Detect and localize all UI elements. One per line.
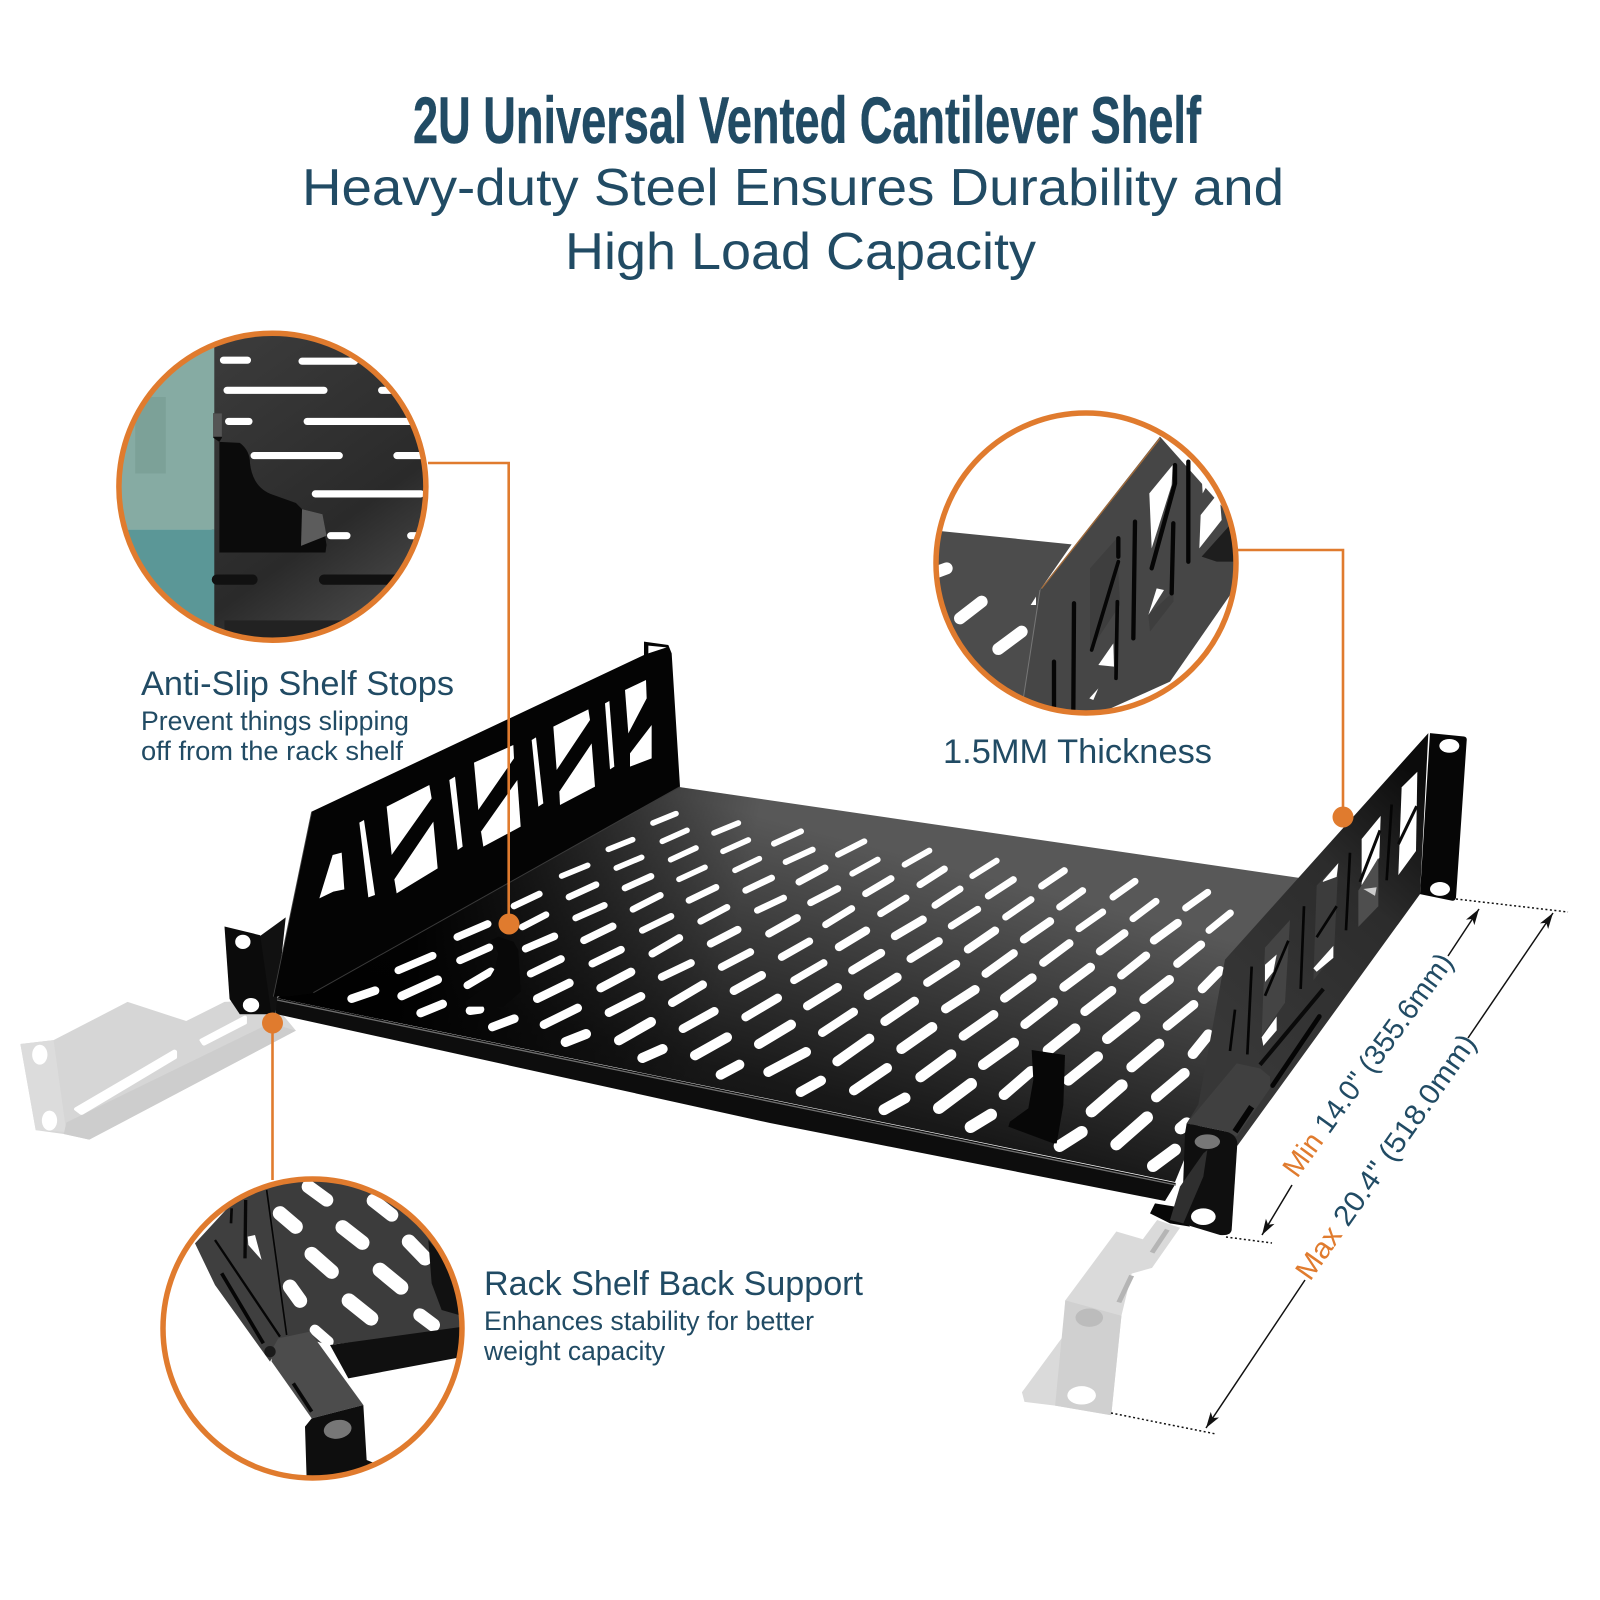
ghost bracket: extended left rail bbox=[20, 1000, 296, 1140]
subtitle line 2: High Load Capacity bbox=[565, 223, 1036, 281]
dot: thickness bbox=[1332, 806, 1354, 828]
panel: thickness detail bbox=[930, 413, 1242, 713]
left rear ear bbox=[224, 917, 286, 1014]
subtitle line 1: Heavy-duty Steel Ensures Durability and bbox=[302, 159, 1284, 217]
connector: back support bbox=[271, 1023, 274, 1180]
dimension label: min: Min 14.0" (355.6mm) bbox=[1277, 947, 1460, 1183]
right upright wall bbox=[1187, 733, 1467, 1146]
dot: back support bbox=[262, 1012, 283, 1034]
shelf stop bracket right bbox=[1008, 1050, 1065, 1143]
panel: anti-slip stop detail bbox=[110, 325, 435, 650]
right front bracket bbox=[1150, 1063, 1270, 1235]
shelf product bbox=[224, 642, 1467, 1235]
heading: thickness: 1.5MM Thickness bbox=[943, 733, 1212, 771]
text: anti-slip line 1: Prevent things slipping bbox=[141, 706, 409, 736]
connector: stops bbox=[428, 463, 509, 924]
front lip bbox=[276, 998, 1176, 1201]
heading: back support: Rack Shelf Back Support bbox=[484, 1265, 864, 1303]
shelf floor bbox=[277, 787, 1300, 1182]
text: back support line 2: weight capacity bbox=[483, 1336, 666, 1366]
left upright wall bbox=[273, 642, 680, 997]
text: back support line 1: Enhances stability for better bbox=[484, 1306, 814, 1336]
ghost bracket: extended right rail bbox=[1022, 1220, 1180, 1415]
vent slots right bbox=[774, 831, 1230, 1166]
vent slots left bbox=[352, 814, 905, 1110]
panel: back support detail bbox=[163, 1179, 465, 1480]
connector: thickness bbox=[1238, 550, 1343, 817]
dot: stops bbox=[498, 914, 520, 934]
dimension lines bbox=[1111, 899, 1568, 1434]
shelf stop bracket left bbox=[465, 937, 521, 1007]
title: 2U Universal Vented Cantilever Shelf bbox=[413, 83, 1202, 157]
text: anti-slip line 2: off from the rack shelf bbox=[141, 736, 404, 766]
heading: anti-slip: Anti-Slip Shelf Stops bbox=[141, 665, 454, 703]
floor shadow near left wall bbox=[277, 787, 1300, 1182]
dimension label: max: Max 20.4" (518.0mm) bbox=[1290, 1028, 1483, 1286]
